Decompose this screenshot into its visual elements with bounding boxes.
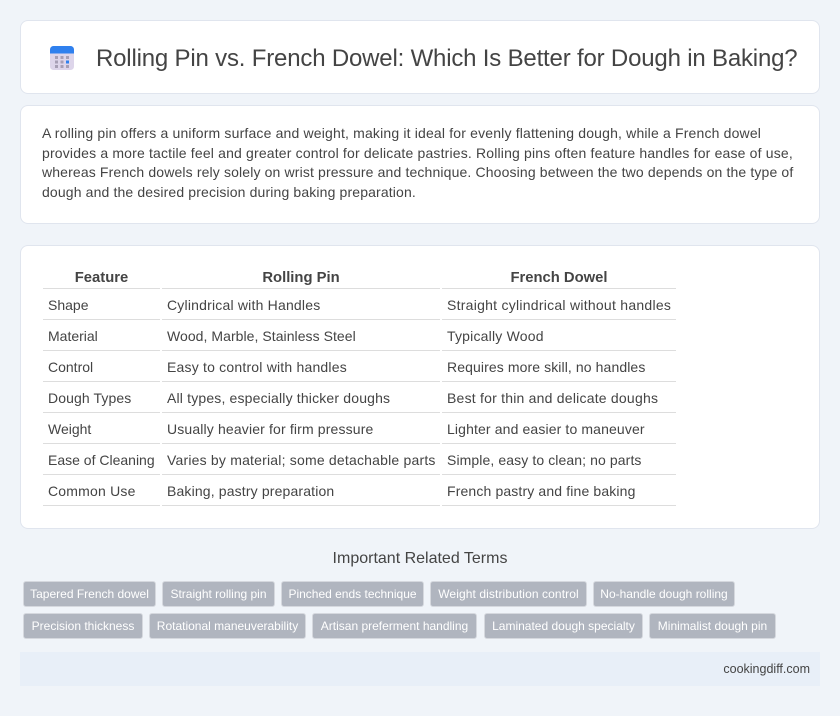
row: Material (43, 319, 676, 344)
row: Dough Types: All types, especially thicker doughs (167, 390, 390, 406)
row: Control: Control (48, 359, 93, 375)
tag (162, 581, 275, 607)
row: Ease of Cleaning: Ease of Cleaning (48, 452, 155, 468)
row: Ease of Cleaning (43, 443, 676, 468)
icon: calendar (50, 46, 74, 70)
tag: Rotational maneuverability (157, 619, 298, 633)
summary paragraph: A rolling pin offers a uniform surface and weight, making it ideal for evenly flattening dough, while a French dowel (42, 125, 761, 141)
tag (430, 581, 587, 607)
row: Common Use: French pastry and fine baking (447, 483, 636, 499)
row: Material: Wood, Marble, Stainless Steel (167, 328, 356, 344)
row: Control: Requires more skill, no handles (447, 359, 645, 375)
tag group: related terms (23, 581, 776, 639)
row: Dough Types: Best for thin and delicate doughs (447, 390, 658, 406)
tag: Laminated dough specialty (492, 619, 635, 633)
panel: summary text (20, 105, 820, 224)
tag: Pinched ends technique (288, 587, 417, 601)
footer source: cookingdiff.com (723, 662, 810, 676)
row: Common Use (43, 474, 676, 506)
tag (484, 613, 643, 639)
summary paragraph: whereas French dowels rely solely on wrist pressure and technique. Choosing between the two depends on the type of (42, 164, 793, 180)
row: Common Use: Baking, pastry preparation (167, 483, 334, 499)
summary paragraph: provides a more tactile feel and greater control for delicate pastries. Rolling pins often feature handles for ease of use, (42, 145, 793, 161)
tag: Minimalist dough pin (658, 619, 767, 633)
heading: related terms: Important Related Terms (333, 550, 507, 567)
row: Control (43, 350, 676, 375)
heading: Rolling Pin vs. French Dowel: Which Is Better for Dough in Baking? (96, 45, 797, 72)
tag: Tapered French dowel (30, 587, 149, 601)
tag: Weight distribution control (438, 587, 579, 601)
row: Shape: Cylindrical with Handles (167, 297, 320, 313)
row: Shape (43, 288, 676, 313)
panel: comparison table (20, 245, 820, 529)
summary paragraph: dough and the desired precision during baking preparation. (42, 184, 416, 200)
tag: Precision thickness (32, 619, 134, 633)
tag: No-handle dough rolling (600, 587, 728, 601)
table header: Feature (75, 270, 128, 286)
row: Ease of Cleaning: Varies by material; some detachable parts (167, 452, 436, 468)
tag (23, 613, 143, 639)
row: Weight: Weight (48, 421, 91, 437)
row: Shape: Shape (48, 297, 88, 313)
row: Common Use: Common Use (48, 483, 136, 499)
row: Material: Material (48, 328, 98, 344)
table header (75, 270, 608, 286)
tag (281, 581, 424, 607)
row: Shape: Straight cylindrical without handles (447, 297, 671, 313)
table header: French Dowel (510, 270, 608, 286)
row: Dough Types: Dough Types (48, 390, 131, 406)
title panel (20, 20, 820, 94)
tag (312, 613, 477, 639)
row: Weight (43, 412, 676, 437)
tag (649, 613, 776, 639)
row: Weight: Usually heavier for firm pressure (167, 421, 373, 437)
tag (23, 581, 156, 607)
footer bar (20, 652, 820, 686)
table header: Rolling Pin (262, 270, 340, 286)
tag (149, 613, 306, 639)
tag (593, 581, 735, 607)
row: Control: Easy to control with handles (167, 359, 347, 375)
row: Ease of Cleaning: Simple, easy to clean; no parts (447, 452, 642, 468)
tag: Straight rolling pin (170, 587, 267, 601)
tag: Artisan preferment handling (321, 619, 468, 633)
row: Weight: Lighter and easier to maneuver (447, 421, 645, 437)
summary paragraph (42, 125, 794, 200)
row: Material: Typically Wood (447, 328, 544, 344)
row: Dough Types (43, 381, 676, 406)
